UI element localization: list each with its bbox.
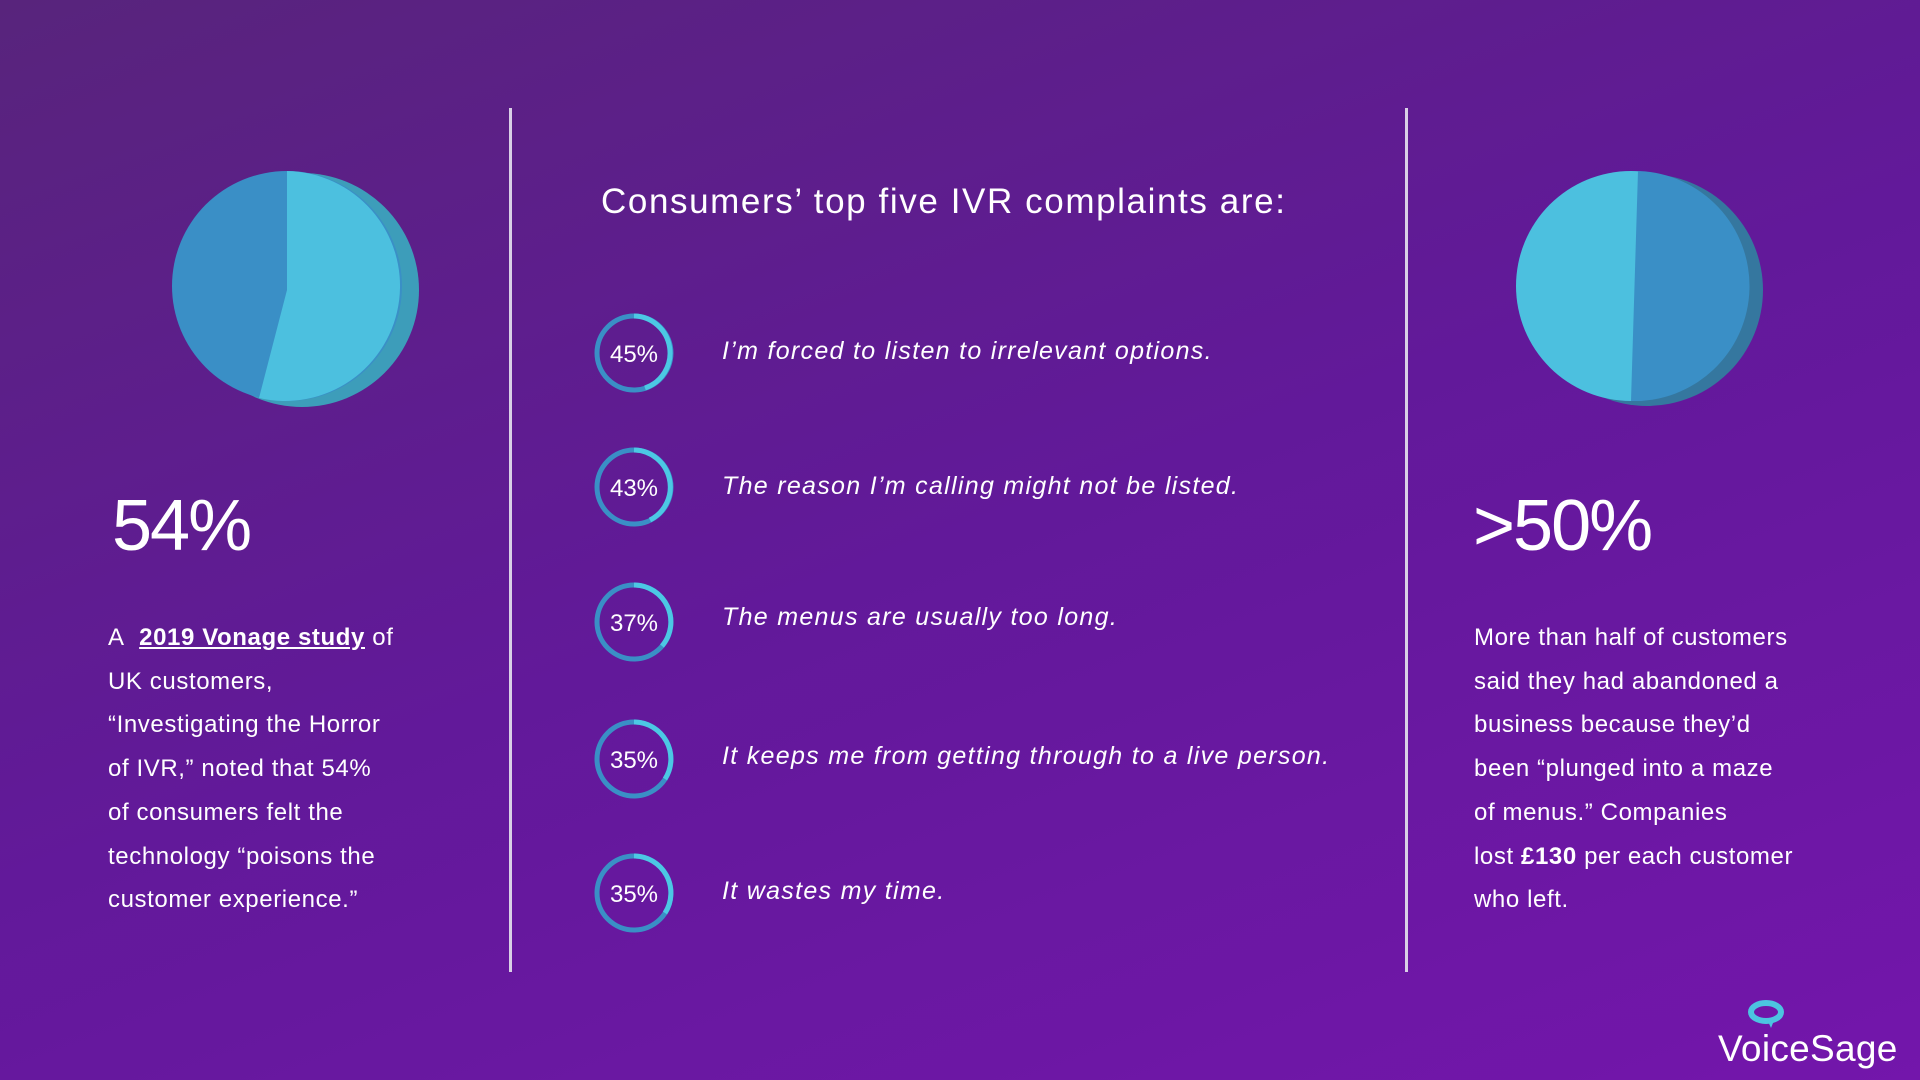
text block left <box>108 624 393 913</box>
text block right <box>1474 624 1793 913</box>
pie chart right <box>1516 171 1763 406</box>
complaint 3: The menus are usually too long. <box>722 603 1118 631</box>
ring 35% b <box>594 854 674 932</box>
text block left: A 2019 Vonage study of <box>108 624 393 651</box>
logo: VoiceSage: VoiceSage <box>1718 1028 1898 1069</box>
ring 45%: 45% <box>610 341 658 368</box>
text block right: lost £130 per each customer <box>1474 843 1793 870</box>
divider left <box>509 108 512 972</box>
ring 45% <box>594 314 674 392</box>
text block left: customer experience.” <box>108 886 358 913</box>
text block left: technology “poisons the <box>108 843 375 870</box>
pie chart left 54% <box>172 171 419 407</box>
text block right: said they had abandoned a <box>1474 668 1779 695</box>
ring 43% <box>594 448 674 526</box>
text block left: of consumers felt the <box>108 799 343 826</box>
complaint 4: It keeps me from getting through to a live person. <box>722 742 1330 770</box>
ring 35% b: 35% <box>610 881 658 908</box>
text block right: business because they’d <box>1474 711 1751 738</box>
stat: 54%: 54% <box>112 486 250 566</box>
text block left: UK customers, <box>108 668 273 695</box>
text block right: been “plunged into a maze <box>1474 755 1773 782</box>
text block left: “Investigating the Horror <box>108 711 380 738</box>
complaint 1: I’m forced to listen to irrelevant options. <box>722 337 1213 365</box>
complaint 2: The reason I’m calling might not be listed. <box>722 472 1239 500</box>
text block right: who left. <box>1474 886 1569 913</box>
text block right: of menus.” Companies <box>1474 799 1727 826</box>
text block left: of IVR,” noted that 54% <box>108 755 371 782</box>
ring 37% <box>594 582 674 662</box>
ring 43%: 43% <box>610 475 658 502</box>
complaints list <box>594 314 674 932</box>
logo: VoiceSage <box>1718 1000 1898 1069</box>
complaint 5: It wastes my time. <box>722 877 945 905</box>
ring 37%: 37% <box>610 610 658 637</box>
icon: speech bubble <box>1748 1000 1784 1028</box>
stat: >50%: >50% <box>1473 486 1651 566</box>
heading: Consumers’ top five IVR complaints are: <box>601 182 1287 221</box>
text block right: More than half of customers <box>1474 624 1788 651</box>
ring 35%: 35% <box>610 747 658 774</box>
divider right <box>1405 108 1408 972</box>
ring 35% <box>594 720 674 798</box>
